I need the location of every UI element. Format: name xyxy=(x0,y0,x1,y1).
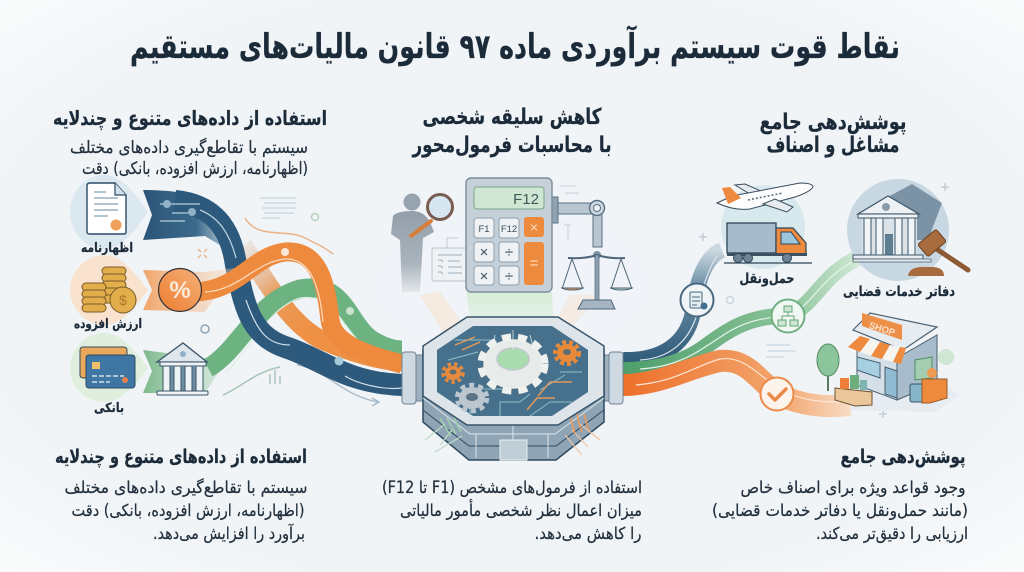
gear: orange left xyxy=(443,364,463,382)
stream: orange loop xyxy=(143,248,402,364)
decorative flow marks left xyxy=(198,198,379,406)
icon: courthouse and gavel xyxy=(847,179,968,281)
stream: blue xyxy=(143,190,402,388)
node: document check xyxy=(680,284,714,316)
calculator buttons: ÷ xyxy=(505,244,513,261)
icon: calculator xyxy=(466,178,552,292)
heading: layered data: استفاده از داده‌های متنوع و چندلایه xyxy=(53,106,327,131)
calculator buttons: × xyxy=(480,244,488,261)
icon: percent badge: % xyxy=(169,277,191,304)
panel: center top heading: کاهش سلیقه شخصی xyxy=(422,105,602,130)
body text: وجود قواعد ویژه برای اصناف خاص xyxy=(740,478,966,498)
panel: right top heading: مشاغل و اصناف xyxy=(766,133,900,158)
label: value added: ارزش افزوده xyxy=(74,317,142,332)
panel: right top heading: پوشش‌دهی جامع xyxy=(760,110,906,135)
processor screen xyxy=(437,326,588,416)
icon: percent badge xyxy=(158,268,202,312)
shop building xyxy=(848,313,937,400)
icon: central processor xyxy=(402,317,623,460)
left connector xyxy=(402,352,426,404)
stream: green xyxy=(143,288,402,393)
intro text xyxy=(70,137,308,179)
stream: orange to shops xyxy=(623,359,850,406)
icon: tax return document xyxy=(70,175,148,249)
heading: پوشش‌دهی جامع xyxy=(840,446,966,468)
calculator buttons: = xyxy=(530,255,539,272)
gear: orange right xyxy=(555,342,579,364)
body text: (اظهارنامه، ارزش افزوده، بانکی) دقت xyxy=(72,501,304,521)
panel: right top heading xyxy=(760,110,906,158)
panel: left top heading and text xyxy=(53,106,327,179)
icon: transport xyxy=(717,183,813,269)
icon: bank building xyxy=(157,343,208,395)
magnifier xyxy=(411,194,452,236)
body text: سیستم با تقاطع‌گیری داده‌های مختلف xyxy=(64,478,308,498)
light beams above processor xyxy=(420,292,600,345)
tree xyxy=(817,344,839,391)
calculator buttons: F1 xyxy=(478,224,490,235)
stream: blue to transport xyxy=(623,250,722,360)
calculator buttons: ÷ xyxy=(505,268,513,285)
icon: inspector person xyxy=(391,194,452,292)
heading: استفاده از داده‌های متنوع و چندلایه xyxy=(55,446,307,468)
calculator buttons: × xyxy=(480,268,488,285)
panel: center bottom text xyxy=(382,478,642,544)
main gear xyxy=(481,337,545,391)
gavel xyxy=(908,229,968,276)
node: check mark xyxy=(760,378,794,410)
icon: scales on mechanical arm xyxy=(552,186,632,309)
stream: green to judicial offices xyxy=(623,257,860,370)
processor base xyxy=(423,350,604,460)
title: نقاط قوت سیستم برآوردی ماده ۹۷ قانون مالیات‌های مستقیم xyxy=(130,25,900,67)
icon: checklist xyxy=(432,238,472,281)
panel: center bottom text: را کاهش می‌دهد. xyxy=(534,524,642,544)
icon: bank cards xyxy=(70,333,148,402)
label: tax return: اظهارنامه xyxy=(81,241,133,256)
calculator buttons xyxy=(474,217,544,285)
body text: برآورد را افزایش می‌دهد. xyxy=(153,524,305,544)
label: judicial services offices: دفاتر خدمات قضایی xyxy=(843,284,955,300)
panel: right bottom text xyxy=(712,446,968,544)
diagram: right service streams xyxy=(623,250,860,406)
right connector xyxy=(599,352,623,404)
awning xyxy=(848,336,906,364)
shop building: SHOP xyxy=(867,320,897,339)
label: banking: بانکی xyxy=(94,401,124,416)
stream: orange descending xyxy=(243,245,402,362)
airplane xyxy=(717,183,813,212)
label: transport: حمل‌ونقل xyxy=(740,271,794,287)
icon: coins: $ xyxy=(119,292,127,308)
panel: center bottom text: استفاده از فرمول‌های مشخص (F1 تا F12) xyxy=(382,478,642,498)
body text xyxy=(712,478,968,544)
diagram: left data streams xyxy=(143,190,402,393)
node: org chart xyxy=(772,300,804,332)
intro text: سیستم با تقاطع‌گیری داده‌های مختلف xyxy=(70,137,308,158)
panel: center top heading: با محاسبات فرمول‌محور xyxy=(412,133,612,158)
icon: coins xyxy=(70,255,148,325)
body text: ارزیابی را دقیق‌تر می‌کند. xyxy=(816,524,968,544)
calculator buttons: F12 xyxy=(501,224,517,235)
processor top face xyxy=(423,317,604,425)
body text: (مانند حمل‌ونقل یا دفاتر خدمات قضایی) xyxy=(712,501,968,521)
calculator buttons: × xyxy=(530,219,538,235)
goods xyxy=(835,357,947,406)
gear: grey xyxy=(457,385,487,411)
panel: center top heading xyxy=(412,105,612,158)
body text xyxy=(64,478,308,544)
panel: center bottom text: میزان اعمال نظر شخصی مأمور مالیاتی xyxy=(400,499,642,521)
intro text: (اظهارنامه، ارزش افزوده، بانکی) دقت xyxy=(82,159,308,179)
truck xyxy=(724,223,812,263)
decorative flow marks right xyxy=(699,183,949,418)
panel: left bottom text xyxy=(55,446,308,544)
icon: shop xyxy=(817,313,960,412)
calculator display: F12 xyxy=(513,191,539,208)
